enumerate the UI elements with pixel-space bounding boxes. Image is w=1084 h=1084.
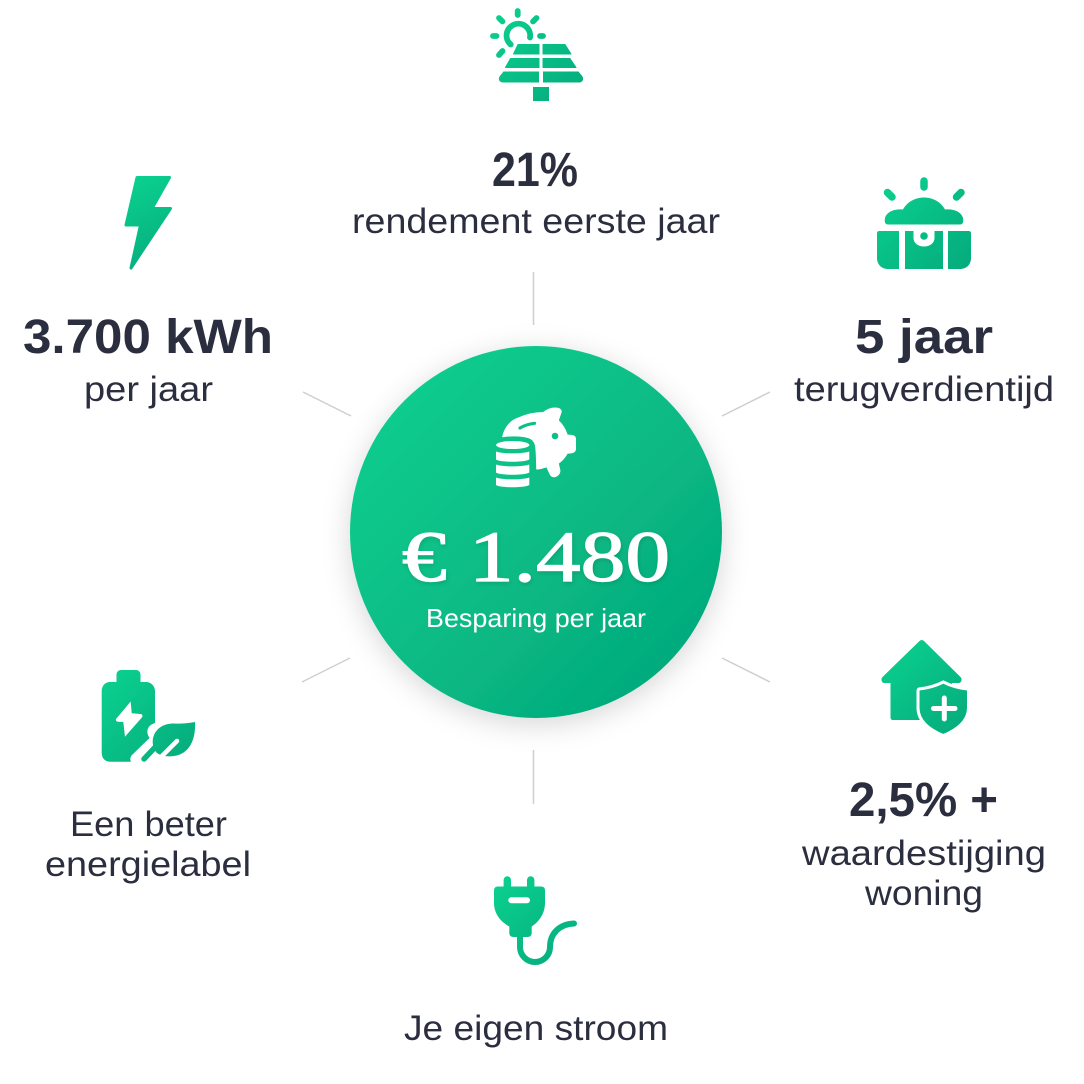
label: waardestijging woning: woning xyxy=(864,874,983,913)
icon: treasure chest xyxy=(877,181,971,269)
value: 2,5% +: 2,5% + xyxy=(849,774,998,827)
panel: home value xyxy=(801,640,1046,913)
panel: energy production xyxy=(23,178,273,409)
icon: house with shield xyxy=(881,640,968,736)
icon: lightning bolt xyxy=(126,178,170,268)
label: Je eigen stroom: Je eigen stroom xyxy=(404,1009,668,1048)
panel: central savings circle xyxy=(350,346,722,718)
label: terugverdientijd: terugverdientijd xyxy=(794,370,1054,409)
value: 21%: 21% xyxy=(492,144,578,197)
icon: solar panel with sun xyxy=(493,11,583,101)
value: 5 jaar: 5 jaar xyxy=(855,311,993,364)
circle background xyxy=(350,346,722,718)
label: Een beter energielabel: energielabel xyxy=(45,845,251,884)
amount: savings: € 1.480 xyxy=(402,517,670,597)
label: rendement eerste jaar: rendement eerste jaar xyxy=(352,202,720,241)
icon: piggy bank with coins xyxy=(496,408,576,487)
panel: payback time xyxy=(794,181,1054,409)
panel: energy label xyxy=(45,670,251,884)
label: Een beter energielabel xyxy=(45,805,251,884)
label: waardestijging woning xyxy=(801,834,1046,913)
icon: power plug xyxy=(494,880,574,962)
label: Een beter energielabel: Een beter xyxy=(70,805,227,844)
label: per jaar: per jaar xyxy=(84,370,213,409)
panel: yield xyxy=(352,11,720,241)
value: 3.700 kWh: 3.700 kWh xyxy=(23,311,273,364)
label: waardestijging woning: waardestijging xyxy=(801,834,1046,873)
icon: battery with leaf xyxy=(102,670,195,762)
caption: savings per year: Besparing per jaar xyxy=(426,603,646,633)
panel: own power xyxy=(404,880,668,1048)
